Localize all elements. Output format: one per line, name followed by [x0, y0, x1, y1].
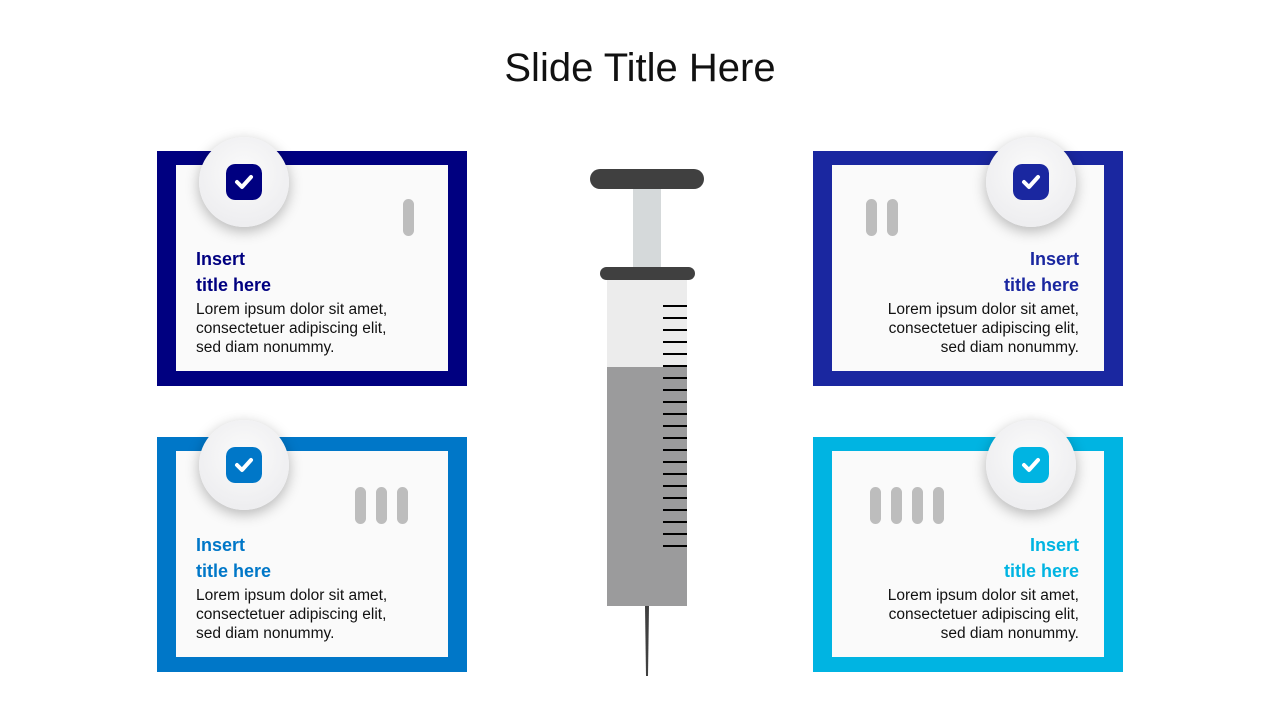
text block: Lorem ipsum dolor sit amet, — [888, 301, 1079, 318]
title: Slide Title Here — [504, 46, 776, 90]
text block — [888, 249, 1079, 356]
text block: consectetuer adipiscing elit, — [889, 320, 1079, 337]
text block: Lorem ipsum dolor sit amet, — [888, 587, 1079, 604]
text block: Insert — [196, 535, 245, 555]
panel: top right — [813, 151, 1123, 386]
text block: title here — [1004, 275, 1079, 295]
text block: title here — [196, 275, 271, 295]
icon: check circle BL — [199, 420, 289, 510]
text block: Lorem ipsum dolor sit amet, — [196, 587, 387, 604]
text block: sed diam nonummy. — [941, 625, 1079, 642]
text block: consectetuer adipiscing elit, — [196, 606, 386, 623]
text block — [196, 249, 387, 356]
text block: title here — [1004, 561, 1079, 581]
text block — [888, 535, 1079, 642]
text block: consectetuer adipiscing elit, — [196, 320, 386, 337]
text block: Lorem ipsum dolor sit amet, — [196, 301, 387, 318]
icon: check circle TL — [199, 137, 289, 227]
text block: Insert — [1030, 249, 1079, 269]
icon: check circle TR — [986, 137, 1076, 227]
panel: bottom left — [157, 437, 467, 672]
panel: top left — [157, 151, 467, 386]
text block: Insert — [1030, 535, 1079, 555]
icon: check circle BR — [986, 420, 1076, 510]
text block: sed diam nonummy. — [941, 339, 1079, 356]
icon: pill marker — [403, 199, 414, 236]
panel: bottom right — [813, 437, 1123, 672]
text block: sed diam nonummy. — [196, 625, 334, 642]
text block: Insert — [196, 249, 245, 269]
icon: pill markers — [355, 487, 408, 524]
text block: title here — [196, 561, 271, 581]
text block — [196, 535, 387, 642]
icon: pill markers — [870, 487, 944, 524]
text block: sed diam nonummy. — [196, 339, 334, 356]
text block: consectetuer adipiscing elit, — [889, 606, 1079, 623]
icon: pill markers — [866, 199, 898, 236]
